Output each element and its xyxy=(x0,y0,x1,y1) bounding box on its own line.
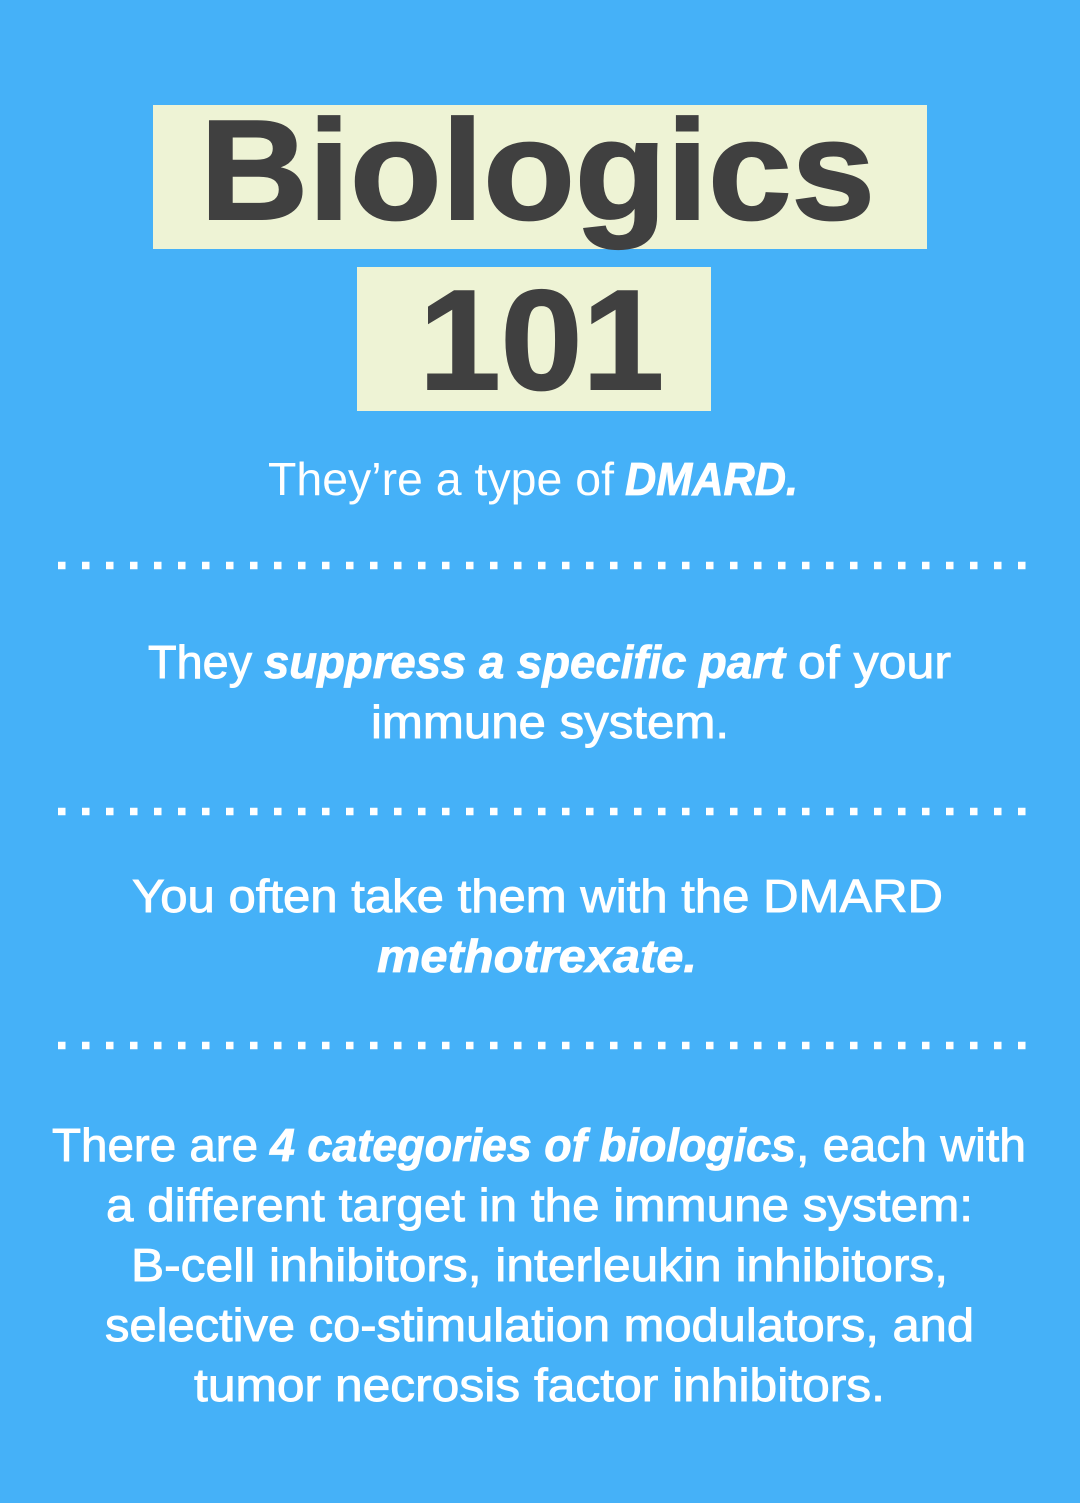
title: 101 xyxy=(357,261,711,420)
text block: 4 categories of biologics: B-cell inhibitors, interleukin inhibitors, xyxy=(131,1239,948,1291)
text block: 4 categories of biologics xyxy=(52,1119,1026,1411)
title: 101: 101 xyxy=(419,261,664,420)
text block: taken with methotrexate: You often take them with the DMARD xyxy=(132,870,943,922)
text block: suppress immune system xyxy=(148,636,951,748)
text block: 4 categories of biologics: tumor necrosis factor inhibitors. xyxy=(194,1359,885,1411)
text block: type of DMARD: DMARD. xyxy=(625,453,798,505)
text block: type of DMARD: They’re a type of xyxy=(268,453,614,505)
text block: taken with methotrexate: methotrexate. xyxy=(377,930,697,982)
title: Biologics: Biologics xyxy=(200,91,875,250)
text block: suppress immune system: immune system. xyxy=(371,696,729,748)
text block: type of DMARD xyxy=(268,453,798,505)
text block: 4 categories of biologics: selective co-stimulation modulators, and xyxy=(105,1299,974,1351)
text block: suppress immune system: They xyxy=(148,636,252,688)
text block: 4 categories of biologics: 4 categories of biologics xyxy=(269,1119,796,1171)
text block: 4 categories of biologics: There are xyxy=(52,1119,258,1171)
text block: taken with methotrexate xyxy=(132,870,943,982)
text block: 4 categories of biologics: , each with xyxy=(796,1119,1026,1171)
text block: 4 categories of biologics: a different target in the immune system: xyxy=(106,1179,973,1231)
text block: suppress immune system: of your xyxy=(798,636,951,688)
text block: suppress immune system: suppress a specific part xyxy=(264,636,787,688)
